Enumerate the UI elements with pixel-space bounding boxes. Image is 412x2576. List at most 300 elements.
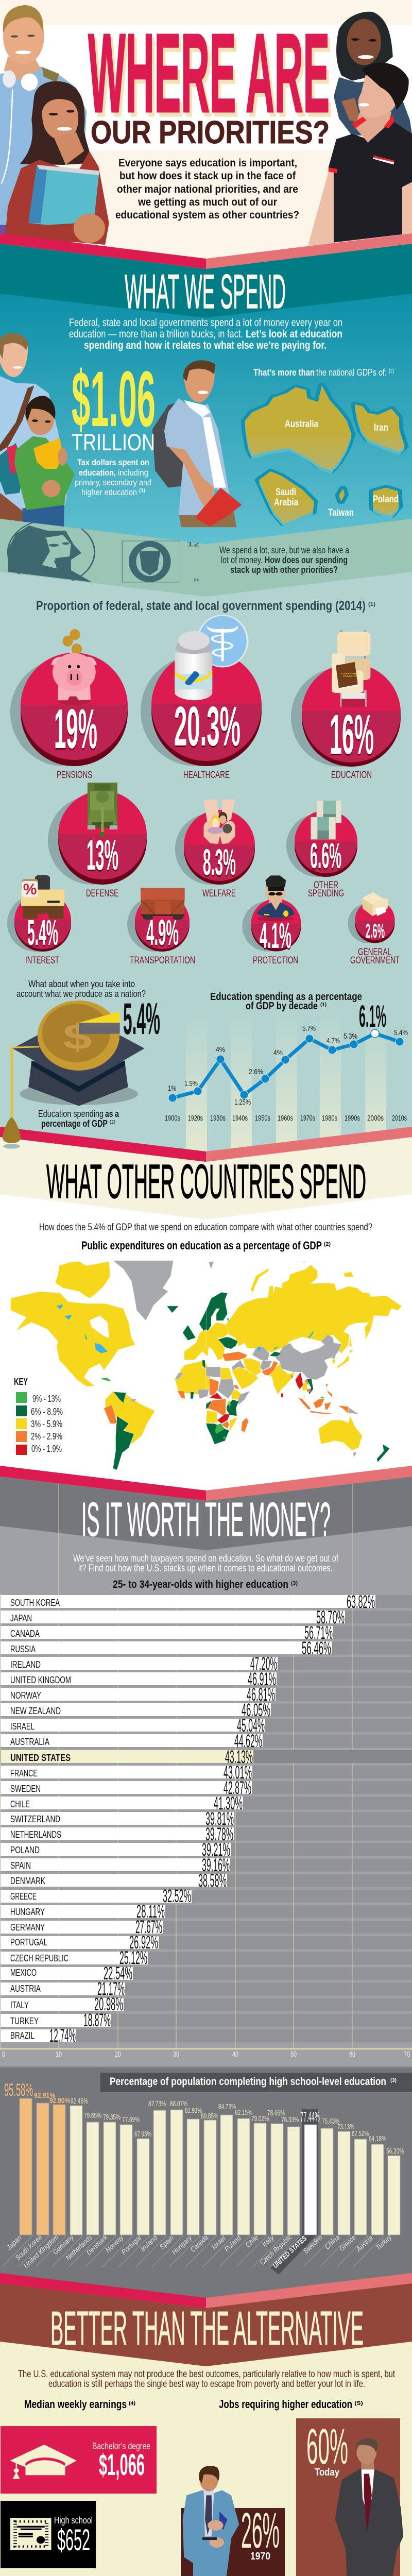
label: national GDPs: (2) [389, 368, 394, 374]
person: student with backpack [152, 360, 242, 527]
line chart: spending by decade: 1960s [278, 1114, 293, 1123]
bar chart: 25- to 34-year-olds with higher education: MEXICO [10, 1968, 37, 1978]
labels: third row: INTEREST [25, 955, 59, 966]
subheadings: Jobs requiring higher education [219, 2398, 352, 2411]
circle: healthcare 20.3%: 20.3% [174, 695, 241, 758]
bar chart: high school completion: 82.15% [235, 2108, 252, 2117]
bar chart: 25- to 34-year-olds with higher education: BRAZIL [10, 2030, 35, 2041]
bar chart: high school completion: Hungary [170, 2233, 194, 2256]
labels: third row: GENERAL [358, 947, 391, 958]
labels: second row: SPENDING [308, 888, 344, 899]
bar chart: 25- to 34-year-olds with higher education: 39.81% [205, 1809, 234, 1829]
bar chart: 25- to 34-year-olds with higher education: 58.70% [316, 1607, 345, 1628]
labels: second row: WELFARE [202, 888, 236, 899]
bar chart: 25- to 34-year-olds with higher education: ISRAEL [10, 1721, 35, 1732]
chart axis: 30 [173, 2050, 179, 2059]
line chart: spending by decade: 1940s [232, 1114, 248, 1123]
person: modern man in grey suit [335, 2438, 403, 2576]
person: 1970s man in blue suit [183, 2466, 239, 2576]
line chart heading: Education spending as a percentage [210, 991, 362, 1003]
section background: what other countries spend [0, 1127, 412, 1494]
bar chart: 25- to 34-year-olds with higher education: NETHERLANDS [10, 1829, 61, 1840]
bar chart: 25- to 34-year-olds with higher education: 28.11% [136, 1902, 165, 1922]
bar chart: high school completion: Germany [51, 2232, 76, 2256]
country labels: Iran [374, 422, 388, 433]
country labels: Taiwan [328, 507, 354, 518]
map heading: Public expenditures on education as a percentage of GDP [81, 1239, 322, 1252]
bar chart: high school completion: 88.07% [170, 2099, 187, 2108]
labels: third row: TRANSPORTATION [130, 955, 195, 966]
bar chart: 25- to 34-year-olds with higher education: GREECE [10, 1891, 37, 1902]
dollar bill artwork: 12 [187, 540, 199, 548]
bar chart: 25- to 34-year-olds with higher education: 46.81% [247, 1685, 275, 1705]
line chart: spending by decade: 1930s [210, 1114, 226, 1123]
line chart heading [210, 991, 362, 1012]
bar chart: 25- to 34-year-olds with higher education: 32.52% [163, 1886, 191, 1906]
bar chart: high school completion: United Kingdom [22, 2233, 60, 2269]
intro paragraph: worth the money: We’ve seen how much taxpayers spend on education. So what do we get out of [73, 1553, 339, 1564]
chart axis: 20 [115, 2050, 121, 2059]
intro text: but how does it stack up in the face of [119, 170, 296, 182]
caption: education spending as percentage: as a [105, 1109, 119, 1119]
bar chart: high school completion: 84.73% [218, 2103, 236, 2111]
bar chart: 25- to 34-year-olds with higher education: CANADA [10, 1629, 40, 1639]
line chart: spending by decade: 4% [273, 1048, 283, 1057]
bar chart: high school completion: 75.43% [322, 2117, 339, 2126]
bar chart: high school completion: 77.69% [122, 2115, 140, 2124]
text: we spend a lot: stack up with other priorities? [230, 565, 338, 575]
label: national GDPs [253, 367, 394, 378]
chart heading: proportion of spending: (1) [368, 601, 375, 607]
circle: other spending 6.6% [286, 801, 357, 877]
circle: healthcare 20.3%: 20.3% [174, 697, 241, 759]
subheadings [24, 2398, 363, 2411]
icon: diploma [10, 2518, 51, 2550]
bar chart: 25- to 34-year-olds with higher education: UNITED KINGDOM [10, 1675, 71, 1685]
labels: top row: PENSIONS [57, 770, 92, 781]
caption: education spending as percentage: Education spending [38, 1109, 104, 1119]
bar chart: 25- to 34-year-olds with higher education: 47.20% [250, 1654, 277, 1674]
panel: bachelor's degree earnings: $1,066 [99, 2448, 145, 2482]
section background: what we spend [0, 233, 412, 1164]
bar chart: 25- to 34-year-olds with higher education: 25.12% [119, 1948, 147, 1968]
line chart: spending by decade: 1950s [255, 1114, 270, 1123]
subheadings: (5) [354, 2401, 363, 2406]
bar chart: high school completion: Poland [222, 2233, 243, 2253]
intro paragraph: what we spend: Federal, state and local governments spend a lot of money every year on [69, 317, 342, 329]
bar chart: high school completion: 92.45% [71, 2097, 88, 2106]
chart heading: high school: (3) [390, 2078, 397, 2083]
circle: education 16% [291, 630, 401, 768]
caption: tax dollars [75, 457, 151, 497]
labels: top row: EDUCATION [331, 770, 372, 781]
bar chart: 25- to 34-year-olds with higher education: SWITZERLAND [10, 1814, 60, 1824]
title [88, 11, 332, 150]
chart axis [0, 2048, 412, 2059]
line chart: spending by decade: 1980s [322, 1114, 337, 1123]
country labels [274, 419, 399, 518]
labels: second row: OTHER [314, 880, 338, 891]
bar chart: high school completion: 92.91% [34, 2091, 55, 2100]
map key [14, 1377, 63, 1455]
icon: desk with percent tile: % [23, 881, 37, 898]
panel: high school earnings [1, 2501, 96, 2568]
circle: defense 13% [48, 783, 147, 885]
chart heading: higher education: 25- to 34-year-olds with higher education [113, 1579, 288, 1590]
country shapes: GDP comparison [245, 385, 405, 527]
country labels: Arabia [274, 497, 298, 508]
line chart: spending by decade: 1990s [345, 1114, 360, 1123]
panel: jobs 1970: 1970 [250, 2551, 270, 2562]
bar chart: high school completion: 80.85% [201, 2112, 218, 2121]
caption: education spending as percentage: percentage of GDP [41, 1118, 108, 1129]
bar chart: 25- to 34-year-olds with higher education: TURKEY [10, 2016, 39, 2026]
icon: freight car [141, 888, 185, 920]
bar chart: high school completion: Ireland [139, 2233, 159, 2253]
panel: bachelor's degree earnings [1, 2426, 157, 2494]
bar chart: 25- to 34-year-olds with higher education: SWEDEN [10, 1784, 41, 1794]
circle: interest 5.4%: 5.4% [27, 914, 58, 954]
bar chart: 25- to 34-year-olds with higher education: NEW ZEALAND [10, 1706, 61, 1716]
text: we spend a lot: We spend a lot, sure, but we also have a [219, 545, 350, 555]
intro paragraph: worth the money: it? Find out how the U.S. stacks up when it comes to educational outcomes. [78, 1563, 333, 1574]
labels: second row [86, 880, 344, 899]
bar chart: 25- to 34-year-olds with higher education: UNITED STATES [10, 1753, 71, 1763]
icon: school desk and book [332, 630, 370, 707]
icon: pill bottle and caduceus [175, 615, 248, 700]
panel: jobs today: 60% [306, 2418, 348, 2475]
labels: third row: PROTECTION [253, 955, 298, 966]
bar chart: high school completion: 81.93% [185, 2106, 202, 2115]
bar chart: 25- to 34-year-olds with higher education: 41.30% [214, 1793, 243, 1814]
intro text: other major national priorities, and are [117, 183, 298, 195]
circle: pensions 19%: 19% [54, 698, 97, 760]
bar chart: high school completion: Netherlands [64, 2233, 94, 2262]
bar chart: 25- to 34-year-olds with higher education: 43.13% [225, 1747, 253, 1767]
labels: second row: DEFENSE [86, 888, 118, 899]
bar chart: high school completion: 92.90% [49, 2096, 70, 2105]
chart axis: 40 [232, 2050, 238, 2059]
map key: 6% - 8.9% [31, 1406, 63, 1417]
chart axis: 60 [349, 2050, 355, 2059]
bar chart: high school completion: Czech Republic [258, 2233, 294, 2266]
icon: piggy bank [51, 629, 97, 705]
bar chart: high school completion: UNITED STATES [271, 2234, 308, 2269]
person: child with yellow folder [14, 396, 75, 527]
circle: protection 4.1% [242, 875, 301, 957]
bar chart: 25- to 34-year-olds with higher education: 46.05% [242, 1700, 270, 1720]
map heading: (2) [324, 1241, 331, 1247]
subheadings: (4) [129, 2401, 135, 2406]
person: man with headphones [0, 5, 87, 235]
line chart: spending by decade: 1% [168, 1084, 176, 1093]
bar chart: 25- to 34-year-olds with higher education: 42.87% [224, 1778, 251, 1798]
circle: interest 5.4%: 5.4% [27, 912, 58, 953]
icon: school desk and book: LITERATURE [341, 672, 359, 675]
country labels: Poland [373, 494, 399, 505]
caption: tax dollars: higher education [81, 487, 137, 497]
circle: defense 13%: 13% [87, 831, 118, 879]
bar chart: high school completion: South Korea [13, 2233, 44, 2262]
line chart heading: of GDP by decade [246, 1001, 318, 1012]
bar chart: high school completion [2, 2080, 404, 2275]
map key: KEY [14, 1377, 28, 1387]
bar chart: 25- to 34-year-olds with higher education: 22.54% [104, 1963, 132, 1984]
bar chart: high school completion: 67.93% [134, 2130, 151, 2139]
mint money band [0, 519, 412, 597]
circle: defense 13%: 13% [87, 833, 118, 880]
bar chart: 25- to 34-year-olds with higher education: POLAND [10, 1845, 40, 1855]
circle: welfare 8.3% [175, 800, 255, 885]
bar chart: 25- to 34-year-olds with higher education: CZECH REPUBLIC [10, 1953, 68, 1963]
intro paragraph: what we spend: spending and how it relates to what else we’re paying for. [84, 340, 327, 351]
bar chart: 25- to 34-year-olds with higher education: RUSSIA [10, 1644, 36, 1654]
text: what about GDP: account what we produce as a nation? [16, 989, 146, 999]
intro paragraph: what we spend: Let’s look at education [246, 328, 342, 340]
bar chart: 25- to 34-year-olds with higher education: 27.67% [135, 1917, 162, 1937]
panel: jobs 1970 [181, 2502, 285, 2576]
map key: 3% - 5.9% [31, 1419, 62, 1429]
chart heading: higher education: (3) [291, 1581, 298, 1586]
icon: police officer [256, 875, 294, 921]
circle: other spending 6.6%: 6.6% [310, 837, 341, 877]
chart axis: 50 [290, 2050, 297, 2059]
icon: money stacks [311, 801, 341, 839]
country labels: Australia [285, 419, 318, 430]
label: national GDPs: the national GDPs of: [316, 367, 387, 378]
text: $1.06 [72, 355, 156, 443]
line chart heading: (1) [320, 1002, 327, 1008]
circle: pensions 19% [10, 629, 128, 766]
bar chart: high school completion: Chile [244, 2233, 260, 2249]
icon: tank [88, 783, 117, 836]
bar chart: 25- to 34-year-olds with higher education: 45.04% [237, 1716, 265, 1736]
bar chart: high school completion: 95.58% [4, 2080, 33, 2100]
bar chart: 25- to 34-year-olds with higher education: 63.82% [347, 1592, 375, 1612]
labels: top row [57, 770, 372, 781]
caption: tax dollars: primary, secondary and [75, 478, 151, 487]
bar chart: 25- to 34-year-olds with higher education: CHILE [10, 1799, 30, 1809]
circle: interest 5.4% [7, 875, 71, 954]
caption: tax dollars: (1) [139, 488, 145, 494]
line chart: spending by decade [165, 999, 408, 1123]
text: we spend a lot [219, 545, 350, 575]
map key: 9% - 13% [32, 1394, 61, 1404]
text: what about GDP: What about when you take into [28, 979, 135, 989]
circle: welfare 8.3%: 8.3% [203, 842, 236, 883]
text: what about GDP [16, 979, 146, 999]
bar chart: 25- to 34-year-olds with higher education: SOUTH KOREA [10, 1598, 60, 1608]
caption: tax dollars: Tax dollars spent on [77, 457, 149, 467]
circle: transportation 4.9%: 4.9% [146, 912, 179, 953]
circle: healthcare 20.3% [141, 615, 262, 766]
bar chart: high school completion: Greece [337, 2233, 357, 2252]
bar chart: 25- to 34-year-olds with higher education: 56.46% [302, 1638, 331, 1658]
bar chart: 25- to 34-year-olds with higher education: 21.17% [97, 1979, 125, 1999]
panel: jobs today: Today [315, 2467, 340, 2478]
line chart: spending by decade: 5.4% [394, 1028, 408, 1037]
bar chart: high school completion: 73.13% [337, 2123, 354, 2131]
bar chart: high school completion: 77.44% [300, 2109, 320, 2125]
panel: jobs today [296, 2418, 400, 2576]
bar chart: 25- to 34-year-olds with higher education: 26.92% [129, 1933, 158, 1953]
bar chart: 25- to 34-year-olds with higher education: NORWAY [10, 1690, 41, 1701]
labels: top row: HEALTHCARE [183, 770, 230, 781]
bar chart: 25- to 34-year-olds with higher education: AUSTRIA [10, 1984, 41, 1994]
section background: better than the alternative [0, 2273, 412, 2576]
bar chart: 25- to 34-year-olds with higher education: HUNGARY [10, 1907, 45, 1917]
text: 26% [241, 2502, 280, 2558]
bar chart: high school completion: Austria [354, 2233, 374, 2253]
caption: tax dollars: including [118, 468, 148, 478]
bar chart: 25- to 34-year-olds with higher education: 44.62% [234, 1731, 262, 1751]
bar chart: 25- to 34-year-olds with higher education: AUSTRALIA [10, 1737, 49, 1747]
bar chart: high school completion: Turkey [374, 2232, 393, 2251]
intro paragraph: worth the money [73, 1553, 339, 1574]
icon: graduation cap [10, 2445, 77, 2479]
bar chart: high school completion: 64.18% [369, 2134, 386, 2143]
line chart: spending by decade: 1.5% [184, 1079, 198, 1088]
icon: desk with percent tile [21, 875, 64, 919]
bar chart: high school completion: Denmark [84, 2233, 109, 2257]
bar chart: high school completion: 78.66% [267, 2109, 285, 2117]
circle: protection 4.1%: 4.1% [260, 916, 291, 956]
bar chart: 25- to 34-year-olds with higher education: SPAIN [10, 1860, 31, 1871]
bar chart: 25- to 34-year-olds with higher education: 56.71% [304, 1623, 333, 1643]
bar chart: 25- to 34-year-olds with higher education: FRANCE [10, 1768, 38, 1778]
label: national GDPs: That’s more than [253, 367, 315, 378]
country labels: Saudi [276, 487, 296, 498]
big number: $1.06 trillion: TRILLION [72, 429, 155, 455]
text: we spend a lot: lot of money. [221, 555, 263, 565]
bar chart: 25- to 34-year-olds with higher education: GERMANY [10, 1922, 45, 1933]
bar chart: 25- to 34-year-olds with higher education: DENMARK [10, 1876, 45, 1886]
bar chart: 25- to 34-year-olds with higher education: 18.87% [83, 2010, 111, 2030]
circle: general government 2.6%: 2.6% [366, 920, 385, 942]
icon: graduation cap with coin [3, 1001, 145, 1149]
line chart: spending by decade: 2000s [367, 1114, 384, 1123]
bar chart: high school completion: Sweden [301, 2233, 324, 2255]
bar chart: high school completion: 79.65% [84, 2111, 101, 2120]
world map: eastern regions [206, 1261, 402, 1462]
bar chart: 25- to 34-year-olds with higher education: JAPAN [10, 1613, 32, 1623]
icon: hands holding people [203, 800, 235, 844]
big number: $1.06 trillion [72, 355, 156, 455]
bar chart: high school completion: China [323, 2233, 341, 2251]
panel: high school earnings: High school [54, 2515, 93, 2526]
bar chart: 25- to 34-year-olds with higher education: 43.01% [224, 1762, 252, 1783]
line chart: spending by decade: 1900s [165, 1114, 180, 1123]
circle: protection 4.1%: 4.1% [260, 917, 291, 957]
chart axis: 10 [56, 2050, 62, 2059]
person: woman with folder [5, 81, 109, 245]
section background: high school chart [0, 2066, 412, 2314]
bar chart: high school completion: Portugal [119, 2233, 143, 2256]
bar chart: 25- to 34-year-olds with higher education: 39.16% [202, 1855, 230, 1875]
bar chart: 25- to 34-year-olds with higher education: 39.78% [205, 1824, 233, 1844]
circle: welfare 8.3%: 8.3% [203, 844, 236, 885]
dollar bill artwork [8, 519, 199, 585]
subheadings: Median weekly earnings [24, 2398, 127, 2411]
caption: education spending as percentage [38, 1109, 119, 1129]
circle: transportation 4.9%: 4.9% [146, 914, 179, 954]
bar chart: high school completion: Spain [158, 2234, 176, 2251]
caption: tax dollars: education, [79, 468, 116, 478]
intro text: we getting as much out of our [138, 196, 277, 208]
section background: is it worth the money [0, 1466, 412, 2067]
panel: high school earnings: $652 [57, 2523, 90, 2557]
bar chart: high school completion: 67.52% [352, 2129, 369, 2138]
bar chart: 25- to 34-year-olds with higher education [0, 1592, 412, 2046]
bar chart: high school completion: Canada [188, 2233, 210, 2253]
line chart: spending by decade: 1920s [188, 1114, 203, 1123]
intro text [115, 157, 299, 221]
circle: general government 2.6% [348, 892, 394, 943]
bar chart: 25- to 34-year-olds with higher education: 46.91% [248, 1669, 276, 1689]
bar chart: high school completion: 87.73% [148, 2099, 166, 2108]
map key: 2% - 2.9% [31, 1431, 62, 1442]
title: OUR PRIORITIES? [91, 115, 330, 150]
panel: bachelor's degree earnings: Bachelor’s degree [92, 2441, 150, 2451]
person: teen with shoulder strap [0, 333, 67, 532]
circle: transportation 4.9% [127, 888, 190, 954]
bar chart: high school completion: Japan [4, 2233, 23, 2252]
bar chart: 25- to 34-year-olds with higher education: 20.98% [94, 1994, 123, 2014]
bar chart: high school completion: 79.35% [103, 2113, 121, 2122]
bar chart: 25- to 34-year-olds with higher education: 39.21% [202, 1840, 230, 1860]
caption: education spending as percentage: (2) [110, 1120, 115, 1125]
dollar bill artwork: H [194, 578, 199, 583]
bar chart: high school completion: Italy [260, 2233, 276, 2248]
stripes behind line chart [186, 1010, 386, 1164]
map key: 0% - 1.9% [31, 1444, 62, 1454]
circle: pensions 19%: 19% [54, 699, 97, 762]
intro paragraph: what we spend [69, 317, 342, 351]
bar chart: high school completion: 76.33% [281, 2115, 299, 2124]
intro text: Everyone says education is important, [118, 157, 297, 169]
line chart: spending by decade: 1970s [300, 1114, 315, 1123]
labels: third row [25, 947, 400, 966]
person: woman in navy shirt [334, 12, 412, 135]
intro text: educational system as other countries? [115, 209, 299, 221]
bar chart: high school completion: 79.02% [251, 2114, 269, 2123]
text: we spend a lot: How does our spending [265, 555, 348, 565]
icon: cardboard box [362, 892, 388, 916]
chart heading: high school [100, 2073, 412, 2092]
line chart: spending by decade: 5.7% [302, 1024, 316, 1033]
hero background [0, 0, 412, 278]
intro paragraph: what we spend: education — more than a trillion bucks, in fact. [69, 328, 243, 340]
bar chart: 25- to 34-year-olds with higher education: PORTUGAL [10, 1937, 47, 1947]
bar chart: high school completion: Israel [210, 2234, 227, 2251]
circle: other spending 6.6%: 6.6% [310, 836, 341, 876]
person: man in black polo [308, 63, 412, 246]
bar chart: high school completion: Norway [104, 2233, 125, 2254]
world map: western regions [10, 1261, 213, 1470]
line chart: spending by decade: 2.6% [249, 1067, 263, 1076]
bar chart: high school completion: 56.20% [386, 2147, 404, 2156]
bar chart: 25- to 34-year-olds with higher education: 38.58% [198, 1871, 227, 1891]
icon: graduation cap with coin: $ [63, 1017, 92, 1057]
bar chart: 25- to 34-year-olds with higher education: ITALY [10, 2000, 29, 2010]
line chart: spending by decade: 5.3% [344, 1032, 357, 1041]
chart axis: 0 [2, 2050, 5, 2059]
bar chart: 25- to 34-year-olds with higher education: IRELAND [10, 1659, 41, 1670]
line chart: spending by decade: 4% [216, 1045, 225, 1054]
text: 5.4% [123, 994, 160, 1044]
icon: school desk and book: CLASSICS [343, 675, 357, 677]
bar chart: 25- to 34-year-olds with higher education: 12.74% [49, 2026, 76, 2046]
